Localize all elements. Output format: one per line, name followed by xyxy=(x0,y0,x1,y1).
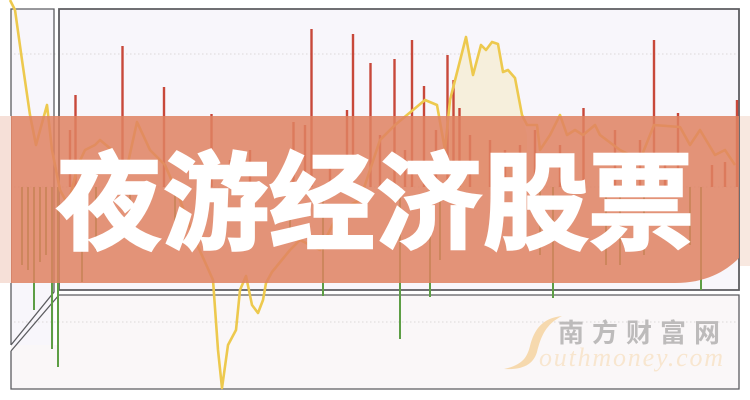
dotted grid lines xyxy=(14,54,738,322)
salmon title band xyxy=(11,116,739,283)
swoosh S xyxy=(504,316,562,369)
red bars xyxy=(70,29,737,187)
brand name: 南方财富网 xyxy=(558,318,728,348)
watermark logo: south money xyxy=(504,316,728,372)
pale band edges xyxy=(0,116,750,283)
yellow area under peak xyxy=(450,37,527,190)
domain: outhmoney.com xyxy=(539,343,725,372)
green bars xyxy=(22,187,701,367)
title: 夜游经济股票 xyxy=(56,146,694,264)
